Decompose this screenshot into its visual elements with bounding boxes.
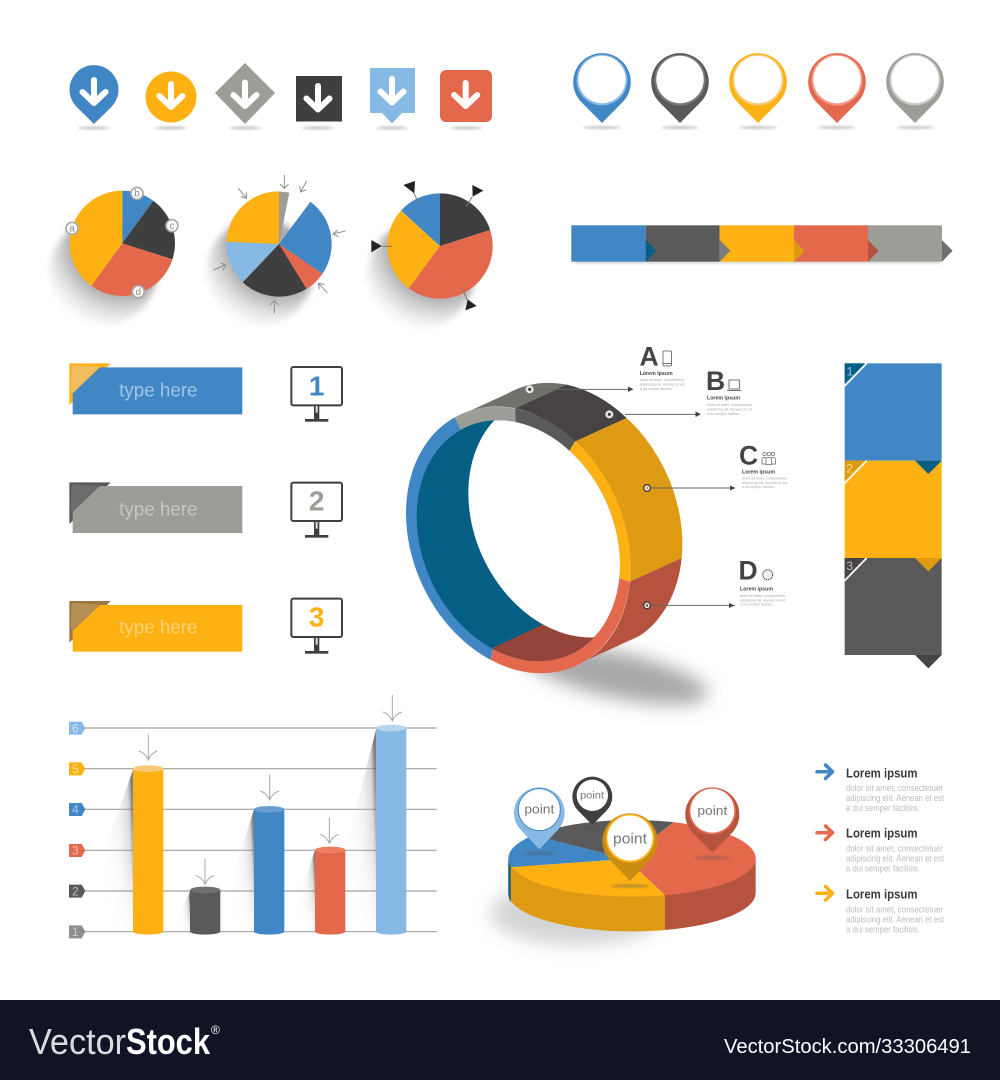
- callout A: [640, 342, 685, 391]
- monitor 3: [291, 599, 342, 654]
- callout B: a dui semper facilisis.: [707, 412, 740, 416]
- 3D ring chart: [367, 363, 735, 717]
- callout D: dolor sit amet, consectetuer: [740, 594, 786, 598]
- pie 1 with letter badges: [50, 187, 178, 325]
- callout C: dolor sit amet, consectetuer: [742, 476, 788, 480]
- legend item 2: [817, 826, 944, 874]
- callout B: adipiscing elit. Aenean et est: [707, 408, 752, 412]
- callout B: B: [706, 366, 725, 396]
- bar: light blue 6: [376, 725, 406, 935]
- callout B: Lorem ipsum: [707, 396, 740, 402]
- bar shadows: [105, 730, 376, 934]
- pin: yellow point: point: [613, 831, 647, 847]
- icon: people: [762, 452, 776, 464]
- legend item 3: adipiscing elit. Aenean et est: [846, 914, 944, 924]
- panel 1 blue: 1: [847, 364, 854, 378]
- legend item 1: a dui semper facilisis.: [846, 803, 920, 813]
- label 2: type here: [69, 482, 242, 533]
- footer bar: [0, 1000, 1000, 1080]
- pin: light blue point: point: [524, 803, 555, 817]
- pin: light blue point: [514, 787, 565, 849]
- legend item 3: a dui semper facilisis.: [846, 924, 920, 934]
- bar: red 3: [315, 847, 345, 935]
- label 1: type here: type here: [119, 381, 197, 402]
- panel 2 yellow: 2: [846, 462, 853, 476]
- axis tags: [69, 721, 85, 939]
- badge a: a: [69, 224, 75, 235]
- legend item 1: [817, 765, 944, 813]
- pin: dark point: point: [580, 790, 604, 801]
- pie charts row: [50, 175, 493, 328]
- labels and monitors column: [69, 363, 342, 654]
- pin shadows: [523, 828, 731, 887]
- icon: phone: [663, 351, 672, 366]
- pin: grey: [886, 53, 944, 129]
- callout C: Lorem ipsum: [742, 469, 775, 475]
- footer logo: ®: [211, 1023, 220, 1037]
- pie shadow: [490, 882, 663, 945]
- callout A: adipiscing elit. Aenean et est: [640, 382, 685, 386]
- badge d: d: [136, 287, 141, 298]
- callout D: a dui semper facilisis.: [740, 603, 773, 607]
- callout C: adipiscing elit. Aenean et est: [742, 481, 787, 485]
- pin: dark grey: [651, 53, 709, 129]
- label 2: type here: type here: [119, 500, 197, 521]
- callout D: Lorem ipsum: [740, 587, 773, 593]
- callout A: a dui semper facilisis.: [640, 387, 673, 391]
- bar: blue 4: [254, 806, 284, 935]
- bar arrows: [139, 695, 402, 884]
- legend item 2: adipiscing elit. Aenean et est: [846, 854, 944, 864]
- badge c: c: [169, 221, 174, 232]
- ring outer surface: [455, 383, 682, 659]
- icon: grey diamond arrow: [215, 63, 275, 124]
- callout B: dolor sit amet, consectetuer: [707, 403, 753, 407]
- footer url: VectorStock.com/33306491: [724, 1036, 971, 1058]
- panel 3 dark: [845, 558, 942, 668]
- legend: [817, 765, 944, 934]
- footer logo: Vector: [29, 1021, 126, 1062]
- callout A: A: [640, 342, 659, 372]
- legend item 2: dolor sit amet, consectetuer: [846, 844, 943, 854]
- ring callouts: [628, 342, 788, 608]
- panel 3 dark: 3: [846, 559, 853, 573]
- pie 3 with black markers: [368, 181, 493, 328]
- label 3: type here: [69, 601, 242, 652]
- pin: yellow point: [602, 813, 658, 881]
- ring markers: [526, 385, 651, 609]
- callout C: C: [739, 440, 758, 470]
- footer logo: Stock: [126, 1021, 211, 1062]
- monitor 1: 1: [309, 371, 324, 402]
- label 1: type here: [69, 363, 242, 414]
- panel 2 yellow: [845, 461, 942, 558]
- label 3: type here: type here: [119, 617, 197, 638]
- horizontal step bar: [571, 225, 953, 264]
- ring shadow: [521, 633, 713, 717]
- bar: yellow 5: [133, 765, 163, 935]
- ring inner wall and hole: [416, 420, 620, 662]
- legend item 2: a dui semper facilisis.: [846, 864, 920, 874]
- pin: yellow: [729, 53, 787, 129]
- legend item 2: Lorem ipsum: [846, 827, 918, 841]
- icon: red rounded square arrow: [440, 70, 492, 122]
- axis tags: 3: [72, 844, 79, 858]
- icon row: arrow badges: [70, 63, 492, 129]
- pie 2 exploded with arrows: [207, 175, 345, 325]
- axis tags: 2: [72, 884, 79, 898]
- monitor 1: [291, 367, 342, 422]
- icon: yellow circle arrow: [146, 72, 196, 122]
- vertical numbered panels: [845, 363, 942, 668]
- legend item 1: adipiscing elit. Aenean et est: [846, 793, 944, 803]
- bar: dark 2: [190, 887, 220, 935]
- monitor 2: 2: [309, 486, 324, 517]
- 3D pie chart with pins: [485, 776, 756, 952]
- callout C: a dui semper facilisis.: [742, 485, 775, 489]
- callout D: adipiscing elit. Aenean et est: [740, 598, 785, 602]
- icon: gear: [763, 570, 773, 580]
- badge b: b: [134, 189, 140, 200]
- pin: red: [808, 53, 866, 129]
- footer logo: [29, 1021, 220, 1062]
- pin: red point: [685, 787, 739, 853]
- legend item 3: [817, 886, 944, 934]
- legend item 3: Lorem ipsum: [846, 887, 918, 901]
- monitor 2: [291, 483, 342, 538]
- icon: dark square arrow: [296, 76, 342, 122]
- grid lines: [83, 728, 437, 932]
- axis tags: 6: [72, 721, 79, 735]
- monitor 3: 3: [309, 602, 324, 633]
- pie sides: [508, 858, 756, 931]
- pin: red point: point: [697, 804, 728, 818]
- callout A: Lorem ipsum: [640, 371, 673, 377]
- icon: blue pin arrow: [70, 65, 119, 124]
- axis tags: 5: [72, 762, 79, 776]
- connector lines: [530, 389, 735, 605]
- icon: laptop: [727, 380, 742, 390]
- callout C: [739, 440, 788, 489]
- callout B: [706, 366, 753, 416]
- map pins row: [573, 53, 944, 129]
- pin: blue: [573, 53, 631, 129]
- ring front rim: [406, 406, 631, 674]
- pin: dark point: [572, 777, 612, 825]
- legend item 3: dolor sit amet, consectetuer: [846, 904, 943, 914]
- axis tags: 4: [72, 803, 79, 817]
- pie top slices: [508, 820, 756, 896]
- legend item 1: dolor sit amet, consectetuer: [846, 783, 943, 793]
- callout D: D: [738, 555, 758, 585]
- legend item 1: Lorem ipsum: [846, 766, 918, 780]
- callout A: dolor sit amet, consectetuer: [640, 378, 685, 382]
- bar chart: [69, 695, 437, 939]
- callout D: [738, 555, 786, 607]
- icon: light blue callout arrow: [370, 68, 415, 124]
- panel 1 blue: [845, 363, 942, 461]
- axis tags: 1: [72, 925, 79, 939]
